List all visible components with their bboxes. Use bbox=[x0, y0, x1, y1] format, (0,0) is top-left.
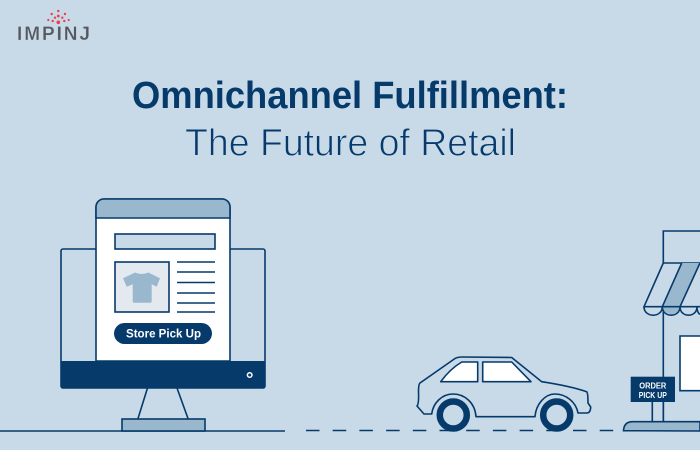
page sheet bbox=[96, 199, 230, 361]
store pavement bbox=[624, 422, 700, 431]
storefront bbox=[624, 231, 700, 431]
button pill bbox=[114, 323, 212, 344]
browser header bbox=[96, 199, 230, 218]
monitor body bbox=[61, 249, 265, 388]
web page bbox=[96, 199, 230, 361]
awning stripe bbox=[662, 263, 700, 314]
logo: Impinj bbox=[17, 10, 90, 45]
car body bbox=[417, 357, 591, 417]
sign posts bbox=[652, 402, 663, 422]
title line 2: The Future of Retail bbox=[185, 122, 516, 164]
button: store pick up bbox=[114, 323, 212, 344]
store wall bbox=[662, 310, 664, 422]
logo wordmark: IMPINJ bbox=[17, 24, 90, 45]
search bar bbox=[115, 234, 215, 249]
rear wheel bbox=[440, 402, 467, 428]
monitor base bbox=[122, 419, 205, 431]
car window rear bbox=[441, 362, 478, 382]
product text lines bbox=[177, 262, 215, 312]
front wheel bbox=[543, 402, 570, 428]
button label: Store Pick Up bbox=[126, 326, 201, 340]
awning bbox=[644, 263, 700, 315]
title line 1: Omnichannel Fulfillment: bbox=[132, 75, 568, 117]
product image box bbox=[115, 262, 169, 312]
store window bbox=[680, 336, 700, 391]
awning outline bbox=[644, 263, 700, 315]
title bbox=[132, 75, 568, 164]
ground line bbox=[0, 430, 285, 432]
icon: t-shirt bbox=[123, 272, 160, 303]
monitor bezel bbox=[61, 361, 265, 388]
order pick up sign: PICK UP bbox=[639, 391, 667, 400]
sign text: ORDER bbox=[639, 382, 667, 390]
car bbox=[417, 357, 591, 428]
order pick up sign bbox=[631, 377, 675, 402]
sign panel bbox=[631, 377, 675, 402]
power button bbox=[247, 373, 252, 377]
computer monitor bbox=[61, 199, 265, 431]
car window front bbox=[483, 362, 531, 382]
monitor stand bbox=[138, 388, 188, 418]
logo dots bbox=[47, 10, 70, 24]
road dashes bbox=[306, 430, 620, 432]
store sign board bbox=[663, 231, 700, 263]
